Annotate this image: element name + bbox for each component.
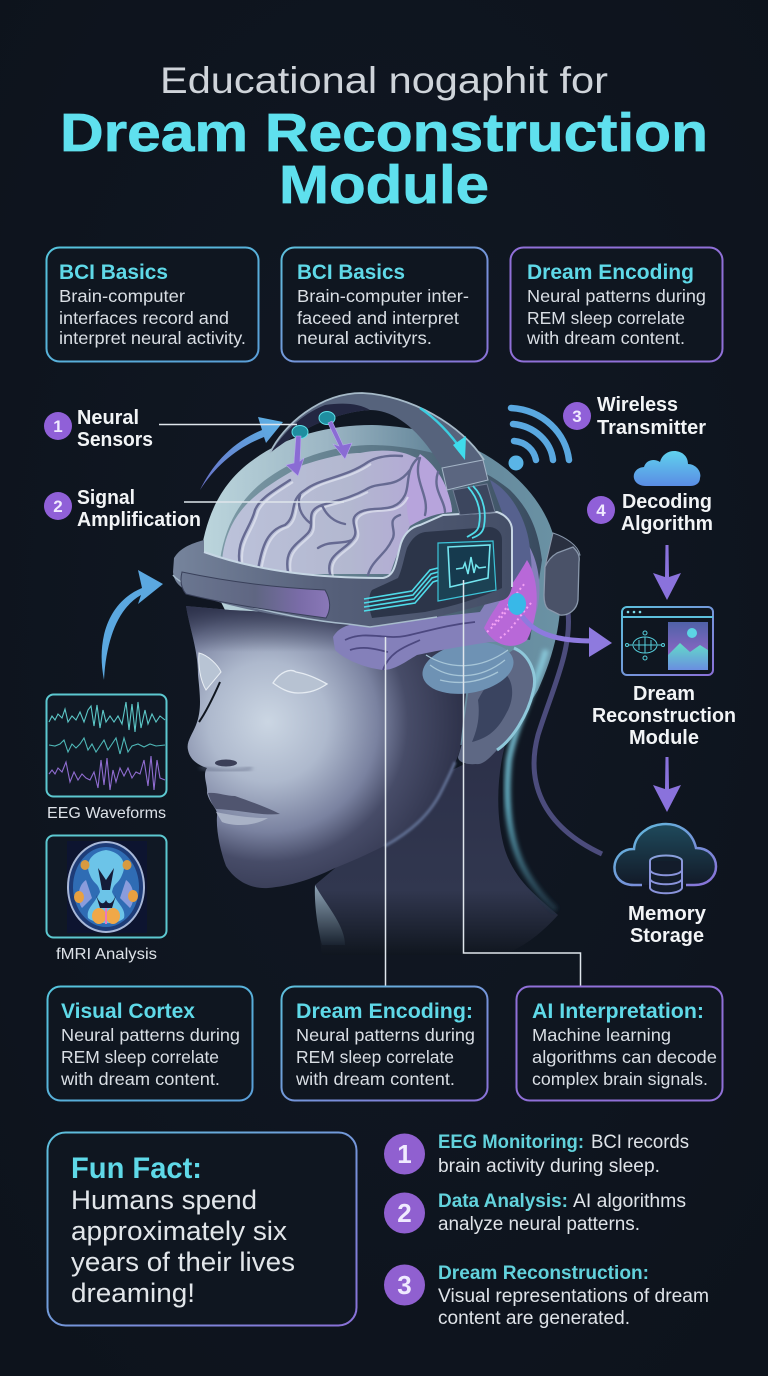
cerebellum <box>418 635 518 701</box>
strap cyan arrow <box>420 408 466 460</box>
panel: Dream Encoding top: REM sleep correlate <box>527 308 685 328</box>
panel: Visual Cortex: Neural patterns during <box>61 1025 240 1045</box>
label 1: Neural Sensors: 1 <box>53 417 63 436</box>
title: Module <box>279 155 489 215</box>
far eye <box>199 653 221 690</box>
side cyan traces <box>364 567 442 611</box>
label: Dream Reconstruction Module: Reconstruction <box>592 705 736 727</box>
label 2: Signal Amplification <box>44 487 201 531</box>
label: Dream Reconstruction Module: Module <box>629 727 699 749</box>
back strap unit <box>544 533 580 615</box>
panel: Fun Fact: dreaming! <box>71 1278 195 1308</box>
step 2: Data Analysis: analyze neural patterns. <box>438 1214 640 1235</box>
arrow: decoding to module <box>653 545 681 600</box>
connector lines <box>159 424 580 986</box>
purple lobes <box>407 454 452 526</box>
step 2: Data Analysis: Data Analysis: <box>438 1191 568 1212</box>
brain folds dark <box>239 456 445 575</box>
label 3: Wireless Transmitter <box>563 394 706 439</box>
side unit and front head band <box>173 512 512 627</box>
step 3: Dream Reconstruction: content are generated. <box>438 1308 630 1329</box>
step 3: Dream Reconstruction: Visual representations of dream <box>438 1286 709 1307</box>
purple output arrow <box>522 616 612 657</box>
panel: AI Interpretation: complex brain signals. <box>532 1069 708 1089</box>
step 1: EEG Monitoring: brain activity during sleep. <box>438 1156 660 1177</box>
forehead shadow <box>186 606 349 648</box>
rear brain behind band <box>490 480 532 620</box>
brainstem <box>396 668 444 736</box>
icon: cloud <box>634 451 700 486</box>
face <box>186 606 470 888</box>
step 2: Data Analysis: 2 <box>397 1198 412 1228</box>
panel: Fun Fact: Humans spend <box>71 1185 257 1215</box>
panel: AI Interpretation <box>516 986 722 1100</box>
panel: Dream Encoding top: with dream content. <box>526 328 685 348</box>
label 4: Decoding Algorithm: Decoding <box>622 491 712 513</box>
panel: BCI Basics middle: neural activityrs. <box>297 328 432 348</box>
blue arrow to sensors <box>200 417 283 490</box>
panel: BCI Basics middle: BCI Basics <box>297 261 405 284</box>
panel: Dream Encoding bottom <box>282 986 488 1100</box>
panel: BCI Basics left: BCI Basics <box>59 261 168 284</box>
panel: BCI Basics middle <box>282 248 488 362</box>
brain folds highlights <box>242 464 408 576</box>
step 3: Dream Reconstruction <box>384 1263 709 1329</box>
chip <box>438 541 496 601</box>
label 1: Neural Sensors: Sensors <box>77 429 153 451</box>
label 2: Signal Amplification: Signal <box>77 487 135 509</box>
step 2: Data Analysis: AI algorithms <box>573 1191 686 1212</box>
nose shadow line <box>199 682 220 722</box>
panel: Fun Fact: Fun Fact: <box>71 1152 202 1185</box>
lower brain <box>333 540 539 670</box>
panel: BCI Basics middle: faceed and interpret <box>297 308 459 328</box>
lips <box>208 793 280 814</box>
label 3: Wireless Transmitter: Wireless <box>597 394 678 416</box>
title: Educational nogaphit for <box>160 60 608 101</box>
nostril <box>215 760 237 766</box>
label 4: Decoding Algorithm: 4 <box>596 501 606 520</box>
panel: AI Interpretation: algorithms can decode <box>532 1047 717 1067</box>
label 2: Signal Amplification: Amplification <box>77 509 201 531</box>
panel: Dream Encoding top: Dream Encoding <box>527 261 694 284</box>
icon: memory storage cloud <box>614 824 716 893</box>
near eye <box>273 670 327 693</box>
panel: Visual Cortex <box>48 986 252 1100</box>
sensors <box>292 412 335 438</box>
label: EEG Waveforms: EEG Waveforms <box>47 805 166 822</box>
side unit inner <box>369 527 502 618</box>
label: Memory Storage <box>628 903 707 947</box>
step 2: Data Analysis <box>384 1191 686 1235</box>
panel: Fun Fact: years of their lives <box>71 1247 295 1277</box>
occipital glow <box>484 560 537 646</box>
panel: BCI Basics left: Brain-computer <box>59 286 185 306</box>
step 1: EEG Monitoring: BCI records <box>591 1132 689 1153</box>
blue arrow to band <box>102 570 163 680</box>
illustration: head with headset <box>102 393 612 955</box>
step 1: EEG Monitoring <box>384 1132 689 1177</box>
step 3: Dream Reconstruction: 3 <box>397 1270 412 1300</box>
step 1: EEG Monitoring: EEG Monitoring: <box>438 1132 584 1153</box>
label 1: Neural Sensors: Neural <box>77 407 139 429</box>
panel: fMRI brain <box>46 836 166 938</box>
panel: AI Interpretation: AI Interpretation: <box>532 1000 704 1023</box>
panel: BCI Basics left: interfaces record and <box>59 308 229 328</box>
panel: Visual Cortex: Visual Cortex <box>61 1000 195 1023</box>
panel: Visual Cortex: REM sleep correlate <box>61 1047 219 1067</box>
step 3: Dream Reconstruction: Dream Reconstruction: <box>438 1263 649 1284</box>
back rim glow <box>507 650 556 910</box>
panel: Dream Encoding bottom: REM sleep correlate <box>296 1047 454 1067</box>
label 4: Decoding Algorithm <box>587 491 713 535</box>
arrow: module to storage <box>653 757 681 812</box>
ear <box>458 650 534 764</box>
panel: EEG waveforms <box>46 694 166 796</box>
strap clip and lower strap <box>453 484 495 515</box>
label 1: Neural Sensors <box>44 407 153 451</box>
label 4: Decoding Algorithm: Algorithm <box>621 513 713 535</box>
panel: BCI Basics middle: Brain-computer inter- <box>297 286 469 306</box>
panel: AI Interpretation: Machine learning <box>532 1025 671 1045</box>
panel: Dream Encoding top: Neural patterns during <box>527 286 706 306</box>
icon: wifi <box>508 408 569 470</box>
label 2: Signal Amplification: 2 <box>53 497 63 516</box>
panel: BCI Basics left: interpret neural activity. <box>59 328 246 348</box>
label 3: Wireless Transmitter: 3 <box>572 407 582 426</box>
glass dome outer <box>200 425 561 745</box>
panel: Dream Encoding bottom: with dream content. <box>295 1069 455 1089</box>
title <box>60 60 708 215</box>
panel: BCI Basics left <box>46 248 258 362</box>
jaw rim <box>385 762 455 846</box>
icon: dream reconstruction window <box>622 607 713 675</box>
label 3: Wireless Transmitter: Transmitter <box>597 417 706 439</box>
panel: Visual Cortex: with dream content. <box>60 1069 220 1089</box>
step 1: EEG Monitoring: 1 <box>397 1139 412 1169</box>
brain upper <box>222 451 452 574</box>
label: fMRI Analysis: fMRI Analysis <box>56 946 157 963</box>
cable to memory storage <box>534 612 602 854</box>
panel: Dream Encoding top <box>510 248 722 362</box>
panel: Dream Encoding bottom: Dream Encoding: <box>296 1000 473 1023</box>
front band inset <box>181 572 330 618</box>
label: Memory Storage: Storage <box>630 925 704 947</box>
purple sensor arrows <box>286 421 352 476</box>
panel: Fun Fact: approximately six <box>71 1216 288 1246</box>
panel: Fun Fact <box>48 1132 356 1326</box>
label: Dream Reconstruction Module <box>592 683 736 749</box>
label: Dream Reconstruction Module: Dream <box>633 683 695 705</box>
label: Memory Storage: Memory <box>628 903 707 925</box>
neck <box>315 745 558 955</box>
title: Dream Reconstruction <box>60 103 708 163</box>
head strap arc <box>270 393 484 468</box>
panel: Dream Encoding bottom: Neural patterns during <box>296 1025 475 1045</box>
